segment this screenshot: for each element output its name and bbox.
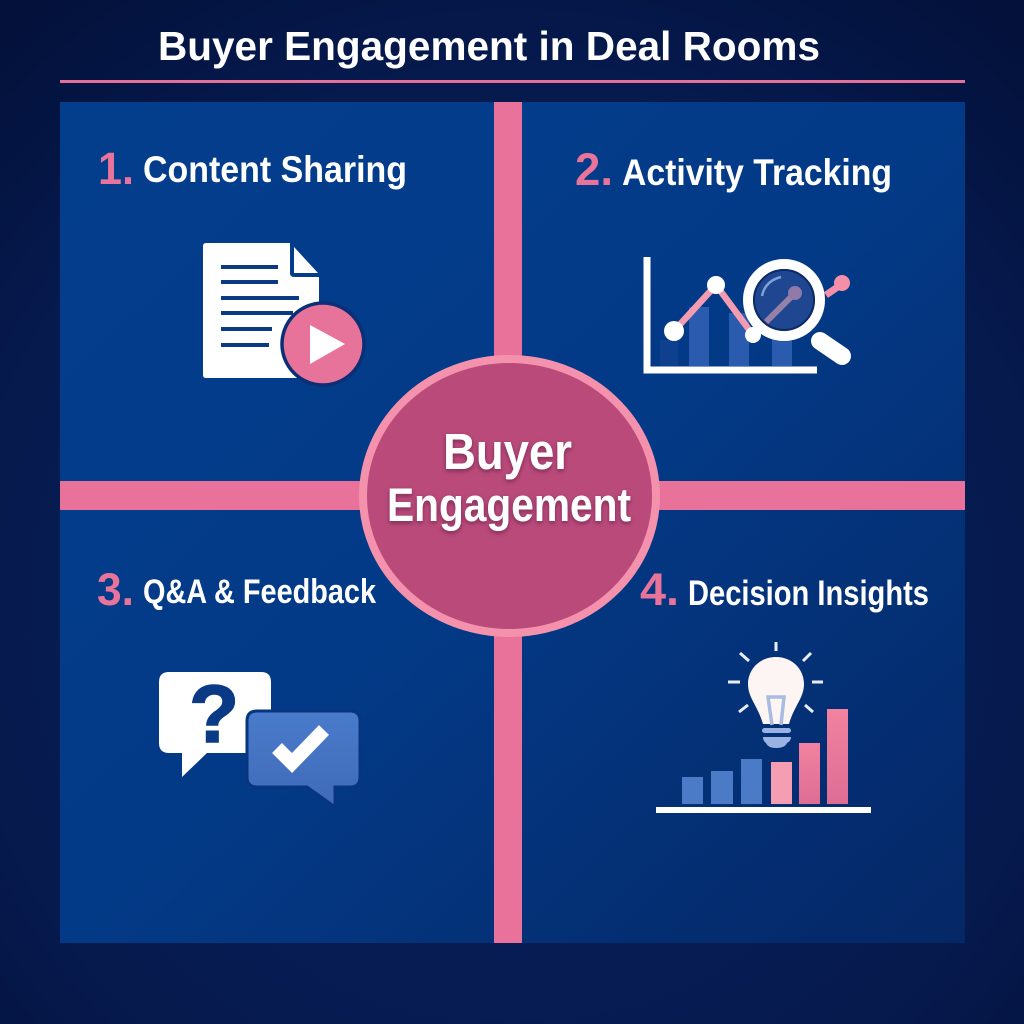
icon: question and check speech bubbles	[159, 669, 360, 807]
center circle: Buyer Engagement	[363, 359, 656, 633]
heading: 2. Activity Tracking	[575, 144, 892, 195]
cross dividers	[60, 102, 965, 943]
heading: 1. Content Sharing: Content Sharing	[143, 149, 407, 190]
icon: lightbulb over bar chart	[656, 642, 871, 813]
panel: quadrant background	[60, 102, 965, 943]
heading: 4. Decision Insights	[640, 564, 929, 615]
heading: 2. Activity Tracking: 2.	[575, 144, 613, 195]
icon: line chart with magnifier	[647, 257, 850, 370]
center circle: Buyer Engagement: Buyer	[443, 423, 572, 480]
title: Buyer Engagement in Deal Rooms	[158, 23, 820, 69]
heading: 4. Decision Insights: 4.	[640, 564, 679, 615]
center circle: Buyer Engagement: Engagement	[387, 478, 631, 531]
heading: 3. Q&A & Feedback	[97, 564, 376, 615]
heading: 1. Content Sharing: 1.	[98, 143, 134, 194]
heading: 2. Activity Tracking: Activity Tracking	[622, 152, 892, 193]
heading: 3. Q&A & Feedback: 3.	[97, 564, 134, 615]
icon: document with play button	[203, 243, 364, 385]
icon: question and check speech bubbles: ?	[189, 669, 239, 760]
heading: 3. Q&A & Feedback: Q&A & Feedback	[143, 573, 376, 611]
heading: 4. Decision Insights: Decision Insights	[688, 574, 929, 613]
heading: 1. Content Sharing	[98, 143, 407, 194]
